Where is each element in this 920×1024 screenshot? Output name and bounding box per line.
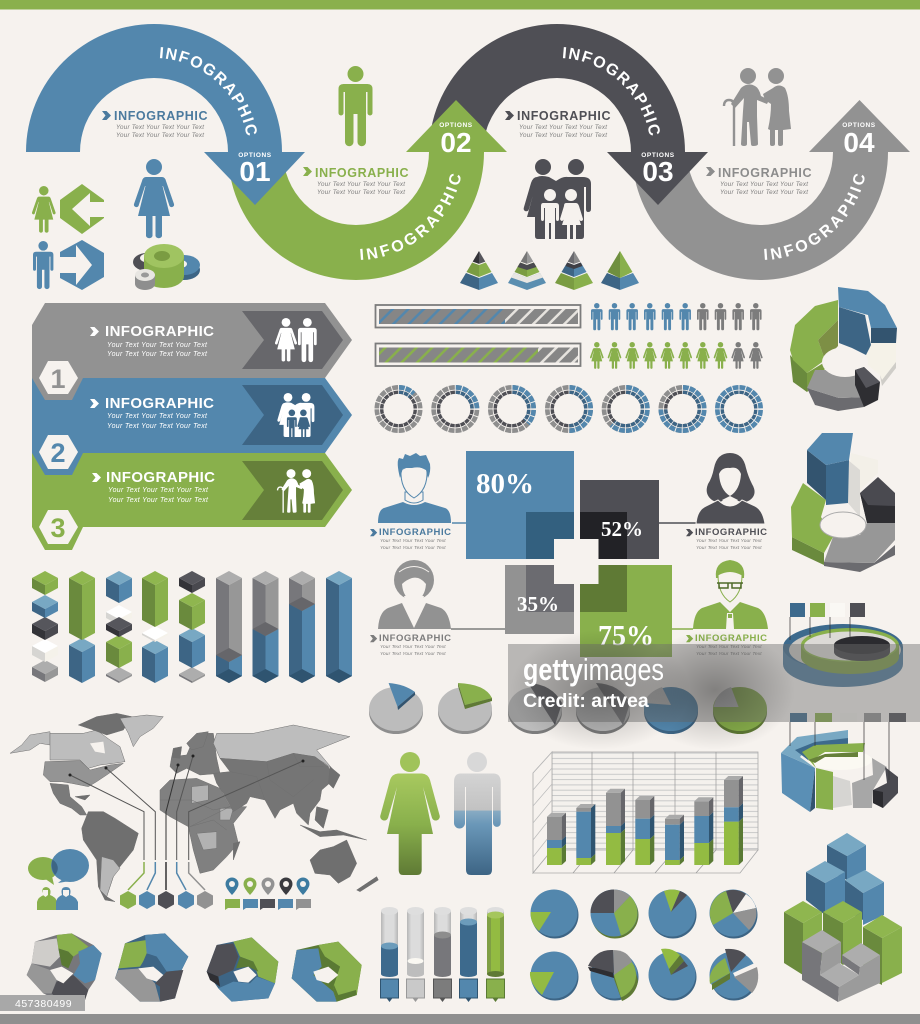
- pie: mostly blue: [644, 687, 698, 734]
- bar 2: [576, 804, 595, 865]
- panel: ribbon 1 gray: Your Text Your Text Your Text: [107, 342, 208, 349]
- percent square: 75%: 75%: [598, 621, 654, 652]
- text block: option 02: Your Text Your Text Your Text: [317, 181, 405, 188]
- panel: ribbon 1 gray: INFOGRAPHIC: [105, 323, 214, 340]
- panel: ribbon 3 green: 3: [50, 513, 66, 543]
- ring 62%: [604, 387, 647, 431]
- ring 12%: [377, 387, 420, 431]
- label flags: [225, 899, 311, 910]
- pie: green wedge: [438, 683, 492, 734]
- panel: ribbon 1 gray: [32, 303, 352, 400]
- percent chart center cross: [554, 539, 598, 584]
- gradient man figure: [454, 752, 501, 875]
- panel: ribbon 3 green: Your Text Your Text Your Text: [108, 487, 209, 494]
- text block: option 04: Your Text Your Text Your Text: [720, 181, 808, 188]
- column 3: [106, 571, 132, 683]
- hex marker blue 2: [178, 891, 194, 909]
- panel: ribbon 3 green: [32, 453, 352, 550]
- map leader lines and hexagon markers: [70, 756, 303, 909]
- text block: option 03: Your Text Your Text Your Text: [519, 124, 607, 131]
- text block: option 03: Your Text Your Text Your Text: [519, 132, 607, 139]
- text block: option 04: Your Text Your Text Your Text: [720, 189, 808, 196]
- text block: option 02: INFOGRAPHIC: [315, 166, 409, 180]
- hexagonal ring 4: [292, 942, 362, 1002]
- 3D donut chart 1: [790, 287, 897, 411]
- arrow 02: green: OPTIONS: [439, 122, 473, 129]
- ring 37%: [490, 387, 534, 431]
- pin dark: [280, 878, 292, 895]
- label: blue man: INFOGRAPHIC: [379, 527, 452, 538]
- top green bar: [0, 0, 920, 10]
- arrow 04: gray: [636, 100, 910, 280]
- pyramid 2: [508, 251, 546, 290]
- progress bar: green: [376, 344, 580, 366]
- location pins: [226, 878, 310, 895]
- panel: ribbon 2 blue: INFOGRAPHIC: [105, 395, 214, 412]
- hex marker gray: [197, 891, 213, 909]
- arrow 01: blue: OPTIONS: [238, 152, 272, 159]
- gray steps: [802, 930, 880, 1002]
- hexagonal ring 2: [115, 933, 188, 1002]
- pictogram row: women: [590, 342, 763, 369]
- 3D stacked bar chart: [533, 752, 758, 873]
- hex marker blue: [139, 891, 155, 909]
- bar 1: [547, 813, 566, 865]
- arrow 02: green: INFOGRAPHIC: [360, 174, 460, 260]
- hex marker green: [120, 891, 136, 909]
- watermark band: gettyimages: [523, 652, 664, 687]
- panel: ribbon 2 blue: Your Text Your Text Your Text: [107, 413, 208, 420]
- percent square: 80%: 80%: [476, 468, 534, 500]
- pie: dark gray wedge: [576, 683, 630, 734]
- ring 50%: [547, 387, 591, 431]
- percent chart connector lines: [451, 523, 696, 629]
- green cubes: [784, 901, 902, 985]
- label: gray woman: Your Text Your Text Your Text: [380, 651, 446, 657]
- ring 75%: [661, 387, 704, 431]
- pie 2: [590, 890, 638, 938]
- pyramid icons: [460, 251, 639, 290]
- text block: option 03: INFOGRAPHIC: [517, 109, 611, 123]
- text block: option 01: INFOGRAPHIC: [114, 109, 208, 123]
- label: dark woman: [686, 527, 768, 551]
- arrow 03: dark: OPTIONS: [641, 152, 675, 159]
- arrow 01: blue: 01: [239, 156, 271, 187]
- label: green man: [686, 633, 768, 657]
- label: green man: INFOGRAPHIC: [695, 633, 768, 644]
- hexagonal ring 1: [27, 933, 102, 1002]
- tube blue low: [380, 907, 398, 1002]
- column 1: [32, 571, 58, 682]
- arrow 03: dark: INFOGRAPHIC: [562, 47, 660, 136]
- percent square: 75%: [580, 565, 672, 657]
- column 6: [216, 571, 242, 683]
- arrow 02: green: 02: [440, 127, 472, 158]
- tube gray: [434, 907, 452, 1002]
- label: green man: Your Text Your Text Your Text: [696, 644, 762, 650]
- icon: small blue man: [33, 241, 53, 289]
- bottom gray bar: [0, 1014, 920, 1024]
- pyramid 4: [601, 251, 639, 290]
- pie grid: [530, 890, 760, 1001]
- hex marker dark: [158, 891, 174, 909]
- text block: option 04: INFOGRAPHIC: [718, 166, 812, 180]
- text block: option 01: Your Text Your Text Your Text: [116, 132, 204, 139]
- isometric cube stack: [784, 833, 902, 1002]
- pie 8: [710, 949, 760, 1000]
- blue cubes: [806, 833, 884, 925]
- panel: ribbon 2 blue: [32, 378, 352, 475]
- icon: 3D rings: [133, 244, 200, 290]
- text block: option 02: Your Text Your Text Your Text: [317, 189, 405, 196]
- icon: green man: [338, 66, 372, 146]
- text block: option 03: [505, 109, 611, 139]
- bar 3: [606, 789, 625, 865]
- tube green: [486, 907, 504, 1002]
- ring 25%: [434, 387, 477, 431]
- percent square: 52%: [580, 480, 659, 559]
- icon: small green and blue busts: [37, 887, 78, 910]
- arrow 02: green: [231, 100, 507, 280]
- label: green man: Your Text Your Text Your Text: [696, 651, 762, 657]
- pin blue 2: [296, 878, 310, 895]
- pin blue: [226, 878, 238, 895]
- arrow 01: blue: [26, 24, 305, 205]
- pie 3: [648, 890, 696, 938]
- text block: option 04: [706, 166, 812, 196]
- arrow 01: blue: INFOGRAPHIC: [160, 47, 257, 136]
- pie: mostly green: [713, 687, 767, 734]
- pie 5: [530, 952, 578, 1000]
- bust: green man with glasses: [693, 560, 768, 629]
- label: blue man: [370, 527, 452, 551]
- column 2: [69, 571, 95, 683]
- world map: [10, 713, 378, 902]
- label: gray woman: [370, 633, 452, 657]
- pie 6: [588, 950, 638, 1001]
- column 7: [252, 571, 278, 683]
- icon: family: [524, 159, 591, 239]
- percent square: 35%: [505, 565, 574, 634]
- pyramid 3: [555, 251, 593, 290]
- pie 7: [648, 949, 696, 1000]
- column 9: [326, 571, 352, 683]
- panel: ribbon 1 gray: Your Text Your Text Your Text: [107, 351, 208, 358]
- panel: ribbon 2 blue: 2: [50, 438, 66, 468]
- stadium ring chart: [783, 603, 903, 687]
- watermark band: [508, 630, 920, 750]
- percent square: 80%: [466, 451, 574, 559]
- image id label: [0, 995, 85, 1011]
- percent square: 35%: 35%: [517, 592, 559, 616]
- pin gray: [262, 878, 274, 895]
- pie: blue wedge: [369, 683, 423, 734]
- image id label: 457380499: [15, 998, 72, 1010]
- panel: ribbon 3 green: INFOGRAPHIC: [106, 469, 215, 486]
- test tube gauges: [380, 907, 504, 1002]
- arrow 04: gray: INFOGRAPHIC: [764, 174, 864, 260]
- pie 4: [710, 890, 758, 938]
- label: dark woman: Your Text Your Text Your Text: [696, 545, 762, 551]
- map location dots: [68, 754, 304, 776]
- label: gray woman: INFOGRAPHIC: [379, 633, 452, 644]
- panel: ribbon 2 blue: Your Text Your Text Your Text: [107, 423, 208, 430]
- arrow 04: gray: OPTIONS: [842, 122, 876, 129]
- tube blue high: [460, 907, 478, 1002]
- arrow 04: gray: 04: [843, 127, 875, 158]
- bust: blue man: [378, 453, 451, 523]
- icon: speech bubbles: [28, 849, 89, 885]
- panel: ribbon 3 green: Your Text Your Text Your Text: [108, 497, 209, 504]
- text block: option 01: Your Text Your Text Your Text: [116, 124, 204, 131]
- bar 6: [694, 797, 713, 865]
- gradient woman figure: [380, 752, 440, 875]
- text block: option 02: [303, 166, 409, 196]
- pin green: [244, 878, 256, 895]
- bar 4: [635, 796, 654, 865]
- column 4: [142, 571, 168, 683]
- percent square: 52%: 52%: [601, 517, 643, 541]
- 3D pie row: [369, 683, 767, 734]
- bar 5: [665, 815, 684, 865]
- label: dark woman: INFOGRAPHIC: [695, 527, 768, 538]
- arrow 03: dark: [432, 24, 708, 205]
- label: gray woman: Your Text Your Text Your Text: [380, 644, 446, 650]
- pie 1: [530, 890, 578, 938]
- ring 100%: [717, 387, 761, 431]
- icon: small green woman: [32, 186, 56, 233]
- bust: dark woman: [696, 453, 765, 524]
- column 5: [179, 571, 205, 683]
- arrow 03: dark: 03: [642, 156, 674, 187]
- icon: blue woman: [134, 159, 174, 238]
- panel: ribbon 1 gray: 1: [50, 364, 66, 394]
- icon: elderly couple: [724, 68, 791, 146]
- icon: green hexagon arrow: [60, 184, 104, 234]
- column 8: [289, 571, 315, 683]
- pyramid 1: [460, 251, 498, 290]
- progress bar: blue: [376, 305, 580, 328]
- pictogram row: men: [591, 303, 762, 330]
- label: blue man: Your Text Your Text Your Text: [380, 545, 446, 551]
- bust: gray woman: [378, 560, 451, 629]
- tube white: [406, 907, 424, 1002]
- segmented ring chart with flags: [781, 713, 906, 812]
- 3D column chart: [32, 571, 352, 683]
- bar 7: [724, 776, 743, 865]
- label: dark woman: Your Text Your Text Your Text: [696, 538, 762, 544]
- progress rings: [377, 387, 761, 431]
- pie: dark wedge: [508, 683, 562, 734]
- label: blue man: Your Text Your Text Your Text: [380, 538, 446, 544]
- icon: blue hexagon arrow: [60, 240, 104, 290]
- watermark band: Credit: artvea: [523, 690, 649, 712]
- hexagonal ring 3: [207, 937, 278, 1002]
- text block: option 01: [102, 109, 208, 139]
- 3D donut chart 2: [791, 433, 895, 572]
